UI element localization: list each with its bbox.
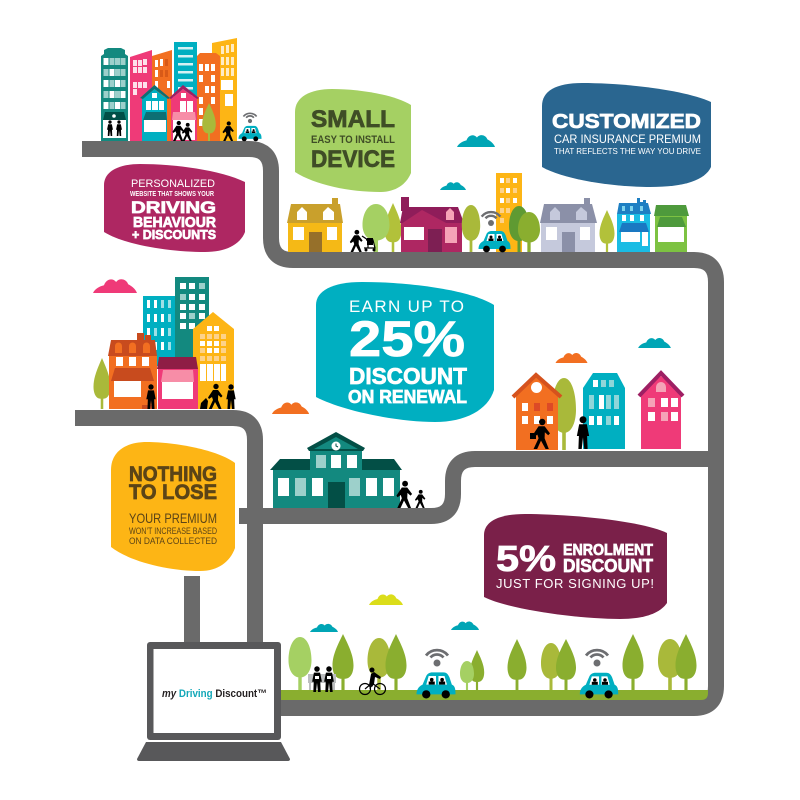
building: teal shop house — [140, 85, 170, 141]
bubble: nothing to lose: ON DATA COLLECTED — [129, 536, 217, 547]
bubble: personalized website: WEBSITE THAT SHOWS YOUR — [130, 191, 214, 198]
icon: connected car — [478, 212, 510, 252]
road: middle route — [239, 459, 716, 516]
bubble: nothing to lose: TO LOSE — [129, 481, 217, 504]
cloud — [638, 338, 671, 348]
bubble: personalized website: BEHAVIOUR — [133, 215, 217, 231]
bubble: personalized website: + DISCOUNTS — [132, 227, 216, 242]
laptop screen — [147, 642, 281, 740]
house: yellow — [287, 198, 343, 252]
bubble: small device: SMALL — [311, 106, 395, 133]
tree — [552, 378, 576, 450]
bubble: customized premium — [542, 83, 711, 187]
parent and child — [396, 481, 425, 508]
bubble: personalized website — [104, 164, 245, 252]
house: grey — [540, 198, 597, 252]
bubble: nothing to lose: WON’T INCREASE BASED — [129, 526, 217, 537]
bubble: 5% enrolment discount: 5% — [496, 538, 556, 579]
bubble: nothing to lose — [111, 442, 235, 571]
building: yellow tower — [496, 173, 522, 252]
bubble: small device: DEVICE — [311, 146, 395, 173]
bubble: small device — [295, 89, 411, 192]
tree — [202, 103, 216, 141]
laptop — [137, 642, 290, 761]
building: teal tower — [143, 296, 177, 366]
people walking — [172, 121, 192, 141]
person on phone — [223, 121, 234, 141]
shop: green — [654, 205, 689, 252]
building: orange tower — [152, 50, 172, 141]
cloud — [369, 594, 403, 605]
building: teal tower — [101, 48, 128, 141]
person with stroller — [350, 230, 376, 252]
building: pink shop house — [169, 85, 199, 141]
building: orange store — [108, 333, 157, 409]
cloud — [93, 279, 137, 293]
bubble: customized premium: THAT REFLECTS THE WAY YOU DRIVE — [554, 146, 701, 156]
cyclist — [360, 668, 386, 694]
cloud — [451, 622, 479, 630]
bubble: nothing to lose: YOUR PREMIUM — [129, 510, 217, 526]
building: dark teal tower — [175, 277, 209, 357]
grass strip — [281, 690, 708, 700]
building: pink tower — [130, 50, 152, 141]
icon: connected car — [580, 650, 618, 698]
bubble: earn up to 25%: DISCOUNT — [349, 363, 467, 389]
tree — [94, 358, 110, 409]
bubble: customized premium: CUSTOMIZED — [552, 111, 701, 133]
icon: connected car — [238, 113, 262, 141]
cloud — [310, 624, 338, 632]
bubble: personalized website: DRIVING — [131, 198, 216, 217]
road: top route — [82, 149, 716, 708]
tree — [462, 205, 480, 252]
bubble: customized premium: CAR INSURANCE PREMIUM — [554, 132, 701, 146]
bubble: 5% enrolment discount — [484, 514, 667, 619]
person on phone — [226, 384, 236, 409]
trees — [509, 206, 540, 252]
building: orange block — [197, 53, 220, 141]
person waving — [146, 384, 156, 409]
building: striped teal tower — [174, 42, 197, 141]
trees — [288, 634, 696, 690]
building: yellow gabled — [193, 312, 234, 409]
house: pink — [639, 373, 683, 449]
logo: my Driving Discount: my Driving Discount™ — [162, 688, 267, 700]
bubble: earn up to 25%: EARN UP TO — [349, 297, 464, 316]
house: magenta — [400, 197, 464, 252]
icon: connected car — [416, 650, 456, 698]
road: left route — [75, 418, 255, 644]
scene: school — [270, 338, 683, 508]
scene: suburban street — [287, 135, 689, 252]
bubble: earn up to 25% — [316, 282, 494, 422]
people on bench — [308, 666, 336, 692]
building: yellow tower — [212, 38, 237, 141]
scene: downtown towers — [101, 38, 262, 141]
cloud — [440, 182, 466, 190]
cloud — [457, 135, 495, 147]
tree — [600, 210, 614, 252]
road network — [75, 149, 716, 708]
bubble: nothing to lose: NOTHING — [129, 463, 217, 486]
bubble: 5% enrolment discount: DISCOUNT — [563, 556, 653, 576]
scene: town corner — [93, 277, 236, 409]
dog walker — [200, 384, 222, 409]
cloud — [556, 353, 588, 363]
bubble: personalized website: PERSONALIZED — [131, 178, 215, 190]
shop: blue — [617, 198, 651, 252]
bubble: 5% enrolment discount: JUST FOR SIGNING UP! — [496, 576, 654, 591]
tree — [362, 203, 402, 252]
bubble: small device: EASY TO INSTALL — [311, 134, 395, 146]
laptop base — [137, 742, 290, 761]
person walking with briefcase — [530, 419, 550, 449]
person on phone — [577, 416, 589, 449]
shop: pink — [157, 357, 198, 409]
building: teal — [583, 373, 625, 449]
house: orange — [513, 375, 561, 450]
scene: park — [281, 594, 708, 700]
bubble: earn up to 25%: 25% — [349, 311, 465, 367]
building: school — [270, 432, 402, 508]
bubble: 5% enrolment discount: ENROLMENT — [563, 542, 653, 559]
road: stub to monitor — [184, 576, 200, 644]
cloud — [272, 402, 309, 414]
bubble: earn up to 25%: ON RENEWAL — [348, 387, 467, 407]
